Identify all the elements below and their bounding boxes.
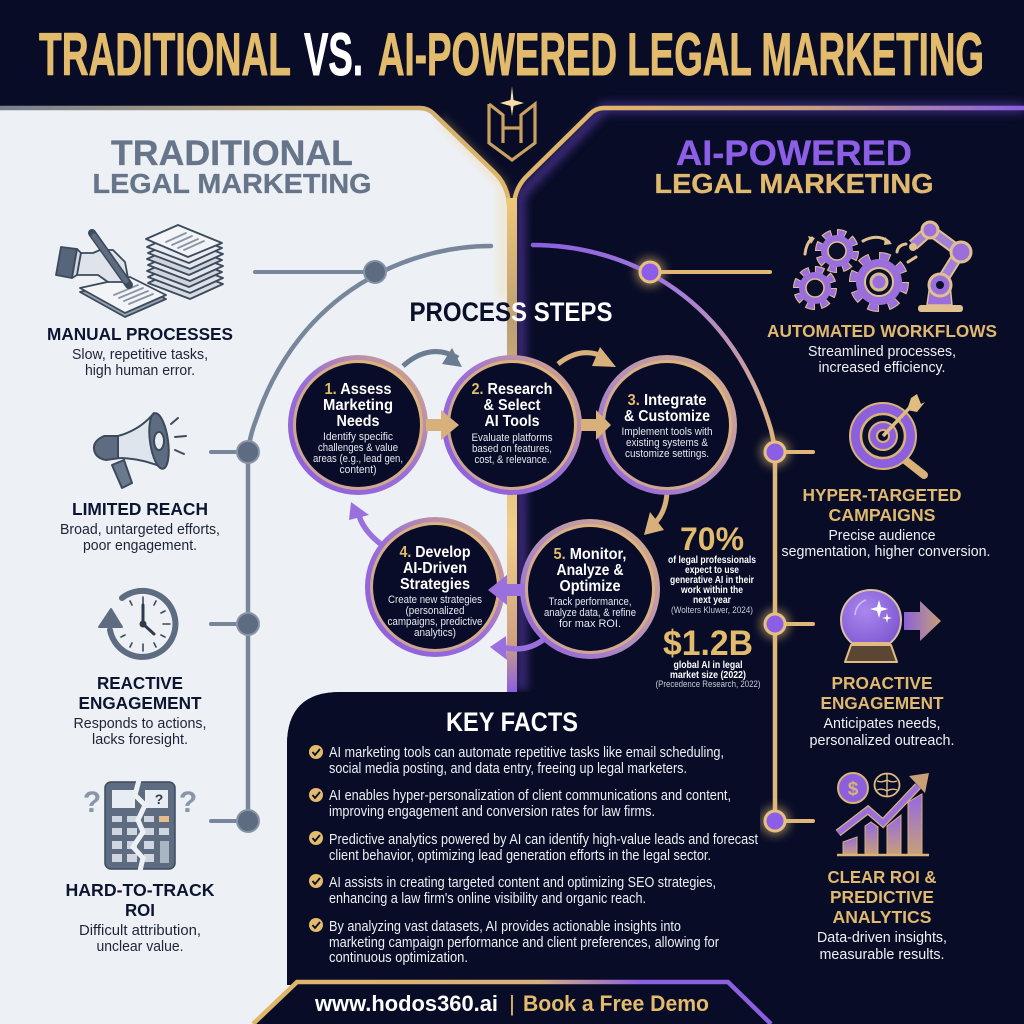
description: proactive engagement: personalized outreach. bbox=[810, 733, 954, 749]
description: automated workflows bbox=[808, 344, 956, 376]
step 5 title: Optimize bbox=[560, 578, 621, 595]
step 3 title bbox=[624, 392, 710, 425]
heading: AI-powered bbox=[654, 134, 934, 199]
fact 4: AI assists in creating targeted content and optimizing SEO strategies, bbox=[329, 875, 716, 891]
description: hard-to-track ROI: unclear value. bbox=[96, 939, 184, 955]
step 5 ring bbox=[520, 519, 660, 659]
step 5 description: analyze data, & refine bbox=[544, 607, 636, 619]
step 3 ring bbox=[597, 355, 737, 495]
step 1 title: Marketing bbox=[323, 397, 393, 414]
step 2 description bbox=[472, 432, 553, 466]
fact 5 bbox=[309, 918, 719, 966]
item: hard-to-track ROI bbox=[66, 780, 215, 955]
step 5 title: 5. Monitor, bbox=[554, 546, 626, 563]
step 3 description bbox=[622, 426, 712, 460]
label: limited reach: LIMITED REACH bbox=[72, 499, 208, 519]
stat: 70% bbox=[668, 521, 756, 616]
footer bar bbox=[253, 982, 771, 1024]
fact 1 bbox=[309, 745, 724, 777]
step 4 title: Strategies bbox=[400, 576, 470, 593]
stat: 70%: generative AI in their bbox=[670, 575, 754, 586]
step 1 description: challenges & value bbox=[318, 442, 398, 454]
description: reactive engagement bbox=[74, 716, 206, 748]
step 2 text bbox=[472, 381, 553, 466]
icon: target with arrow and magnifier bbox=[850, 394, 925, 475]
description: manual processes bbox=[72, 347, 208, 379]
fact 3 bbox=[309, 831, 758, 864]
stat: 70%: of legal professionals bbox=[668, 555, 756, 566]
label: clear ROI and predictive analytics: ANALYTICS bbox=[832, 907, 932, 927]
description: clear ROI and predictive analytics: Data-driven insights, bbox=[817, 930, 947, 946]
icon: gears and robot arm bbox=[796, 222, 971, 312]
step 4 description: Create new strategies bbox=[388, 594, 483, 606]
step 2 ring bbox=[442, 355, 582, 495]
description: hyper-targeted campaigns bbox=[782, 528, 990, 560]
step 3 title: 3. Integrate bbox=[628, 392, 707, 409]
step 2 description: cost, & relevance. bbox=[474, 454, 550, 466]
label: hard-to-track ROI: ROI bbox=[125, 900, 155, 920]
panel: traditional background bbox=[0, 110, 507, 1024]
icon: broken calculator: ? bbox=[83, 786, 101, 819]
description: hyper-targeted campaigns: Precise audience bbox=[828, 528, 936, 544]
step 3 text bbox=[622, 392, 712, 460]
fact 3: Predictive analytics powered by AI can identify high-value leads and forecast bbox=[329, 832, 758, 848]
label: hyper-targeted campaigns bbox=[802, 485, 962, 525]
step 4 description: campaigns, predictive bbox=[388, 616, 482, 628]
process flow curved arrows bbox=[349, 347, 667, 545]
heading: traditional: LEGAL MARKETING bbox=[92, 168, 372, 199]
stat: 70%: next year bbox=[693, 595, 731, 606]
item: limited reach bbox=[60, 412, 220, 554]
icon: coin, brain and growth chart bbox=[837, 773, 929, 855]
step 5 description: Track performance, bbox=[548, 596, 632, 608]
step 4 description bbox=[388, 594, 483, 639]
stat: $1.2B: market size (2022) bbox=[670, 670, 746, 681]
description: manual processes: high human error. bbox=[85, 363, 195, 379]
call to action: Book a Free Demo bbox=[523, 991, 709, 1016]
panel borders and centre divider bbox=[0, 108, 1024, 692]
fact 5: continuous optimization. bbox=[329, 950, 468, 966]
label: manual processes: MANUAL PROCESSES bbox=[47, 324, 233, 344]
label: reactive engagement bbox=[78, 673, 202, 713]
icon: broken calculator: ? bbox=[155, 791, 163, 807]
logo bbox=[489, 86, 535, 160]
stat: $1.2B: (Precedence Research, 2022) bbox=[656, 679, 760, 690]
item: reactive engagement bbox=[74, 591, 206, 748]
label: proactive engagement bbox=[820, 673, 944, 713]
heading: traditional: TRADITIONAL bbox=[111, 134, 353, 173]
step 2 description: Evaluate platforms bbox=[472, 432, 553, 444]
step 5 description bbox=[544, 596, 636, 630]
step 1 description: areas (e.g., lead gen, bbox=[313, 453, 403, 465]
step 3 description: existing systems & bbox=[626, 437, 709, 449]
label: automated workflows: AUTOMATED WORKFLOWS bbox=[767, 321, 997, 341]
step 5 title bbox=[554, 546, 626, 595]
fact 5: marketing campaign performance and client preferences, allowing for bbox=[329, 935, 719, 951]
step 5 description: for max ROI. bbox=[559, 618, 621, 630]
step 1 title: 1. Assess bbox=[324, 381, 392, 398]
step 4 description: analytics) bbox=[414, 627, 456, 639]
step 3 title: & Customize bbox=[624, 408, 710, 425]
step 1 text bbox=[313, 381, 403, 476]
step 1 description bbox=[313, 431, 403, 476]
fact 4: enhancing a law firm's online visibility and organic reach. bbox=[329, 891, 646, 907]
heading: key facts: KEY FACTS bbox=[446, 707, 578, 737]
label: proactive engagement: ENGAGEMENT bbox=[820, 693, 944, 713]
step 3 description: Implement tools with bbox=[622, 426, 712, 438]
panel glow: AI side bbox=[440, 108, 1024, 690]
fact 2 bbox=[309, 788, 731, 820]
description: limited reach bbox=[60, 522, 220, 554]
process flow block arrows bbox=[426, 410, 611, 660]
icon: crystal ball with arrow bbox=[841, 590, 941, 662]
label: hard-to-track ROI bbox=[66, 880, 215, 920]
description: manual processes: Slow, repetitive tasks, bbox=[72, 347, 208, 363]
description: clear ROI and predictive analytics: measurable results. bbox=[820, 947, 944, 963]
step 5 title: Analyze & bbox=[556, 562, 624, 579]
description: reactive engagement: Responds to actions, bbox=[74, 716, 206, 732]
description: hard-to-track ROI: Difficult attribution, bbox=[79, 923, 201, 939]
step 4 description: (personalized bbox=[406, 605, 464, 617]
step 4 title bbox=[400, 544, 470, 593]
item: hyper-targeted campaigns bbox=[782, 394, 990, 560]
description: limited reach: Broad, untargeted efforts, bbox=[60, 522, 220, 538]
label: clear ROI and predictive analytics: PREDICTIVE bbox=[830, 887, 934, 907]
step 3 description: customize settings. bbox=[625, 448, 709, 460]
step 2 title: & Select bbox=[484, 397, 540, 414]
step 2 title: AI Tools bbox=[484, 413, 540, 430]
step 1 title bbox=[323, 381, 393, 430]
stat: 70%: expect to use bbox=[685, 565, 739, 576]
description: hyper-targeted campaigns: segmentation, higher conversion. bbox=[782, 544, 990, 560]
fact 5: By analyzing vast datasets, AI provides actionable insights into bbox=[329, 919, 681, 935]
description: reactive engagement: lacks foresight. bbox=[92, 732, 188, 748]
stat: 70%: work within the bbox=[680, 585, 743, 596]
heading: AI-powered: AI-POWERED bbox=[676, 134, 912, 173]
title bbox=[39, 21, 984, 88]
label: reactive engagement: REACTIVE bbox=[97, 673, 183, 693]
heading: traditional bbox=[92, 134, 372, 199]
item: automated workflows bbox=[767, 222, 997, 376]
icon: hand writing and paper stack bbox=[56, 225, 223, 317]
stat: $1.2B: $1.2B bbox=[663, 624, 753, 663]
step 4 title: AI-Driven bbox=[403, 560, 467, 577]
heading: process steps: PROCESS STEPS bbox=[410, 297, 612, 327]
panel: key facts bbox=[287, 692, 760, 985]
icon: broken calculator bbox=[83, 780, 197, 871]
timeline: traditional bbox=[211, 246, 491, 832]
step 4 title: 4. Develop bbox=[400, 544, 470, 561]
stat: $1.2B bbox=[656, 624, 760, 690]
label: proactive engagement: PROACTIVE bbox=[832, 673, 932, 693]
icon: megaphone bbox=[94, 412, 186, 488]
fact 2: improving engagement and conversion rates for law firms. bbox=[329, 804, 655, 820]
step 1 description: Identify specific bbox=[323, 431, 394, 443]
step 2 title bbox=[472, 381, 552, 430]
title: TRADITIONAL bbox=[39, 21, 291, 88]
heading: AI-powered: LEGAL MARKETING bbox=[654, 168, 934, 199]
step 4 ring bbox=[365, 517, 505, 657]
item: manual processes bbox=[47, 225, 233, 379]
step 4 text bbox=[388, 544, 483, 639]
item: proactive engagement bbox=[810, 590, 954, 749]
step 1 ring bbox=[288, 355, 428, 495]
description: automated workflows: Streamlined processes, bbox=[808, 344, 956, 360]
icon: broken calculator: ? bbox=[179, 786, 197, 819]
description: proactive engagement bbox=[810, 716, 954, 749]
step 1 description: content) bbox=[340, 464, 376, 476]
description: proactive engagement: Anticipates needs, bbox=[824, 716, 940, 732]
fact 2: AI enables hyper-personalization of client communications and content, bbox=[329, 788, 731, 804]
fact 4 bbox=[309, 874, 716, 907]
icon: coin, brain and growth chart: $ bbox=[848, 779, 859, 800]
stat: 70%: 70% bbox=[680, 521, 744, 557]
description: clear ROI and predictive analytics bbox=[817, 930, 947, 963]
label: reactive engagement: ENGAGEMENT bbox=[78, 693, 202, 713]
separator: | bbox=[509, 991, 515, 1016]
description: hard-to-track ROI bbox=[79, 923, 201, 955]
stat: $1.2B: global AI in legal bbox=[674, 660, 743, 671]
fact 3: client behavior, optimizing lead generation efforts in the legal sector. bbox=[329, 848, 711, 864]
label: hard-to-track ROI: HARD-TO-TRACK bbox=[66, 880, 215, 900]
step 1 title: Needs bbox=[336, 413, 380, 430]
stat: 70%: (Wolters Kluwer, 2024) bbox=[671, 605, 753, 616]
label: clear ROI and predictive analytics: CLEAR ROI & bbox=[828, 867, 937, 887]
step 2 description: based on features, bbox=[472, 443, 552, 455]
fact 1: AI marketing tools can automate repetitive tasks like email scheduling, bbox=[329, 745, 724, 761]
label: hyper-targeted campaigns: HYPER-TARGETED bbox=[802, 485, 962, 505]
item: clear ROI and predictive analytics bbox=[817, 773, 947, 963]
website: www.hodos360.ai bbox=[314, 991, 498, 1016]
title: VS. bbox=[304, 21, 363, 88]
step 2 title: 2. Research bbox=[472, 381, 552, 398]
fact 1: social media posting, and data entry, freeing up legal marketers. bbox=[329, 761, 687, 777]
step 5 text bbox=[544, 546, 636, 630]
description: limited reach: poor engagement. bbox=[83, 538, 197, 554]
label: hyper-targeted campaigns: CAMPAIGNS bbox=[828, 505, 936, 525]
icon: clock with arrow bbox=[99, 591, 175, 657]
timeline: AI-powered bbox=[533, 245, 813, 835]
description: automated workflows: increased efficiency. bbox=[818, 360, 946, 376]
label: clear ROI and predictive analytics bbox=[828, 867, 937, 927]
